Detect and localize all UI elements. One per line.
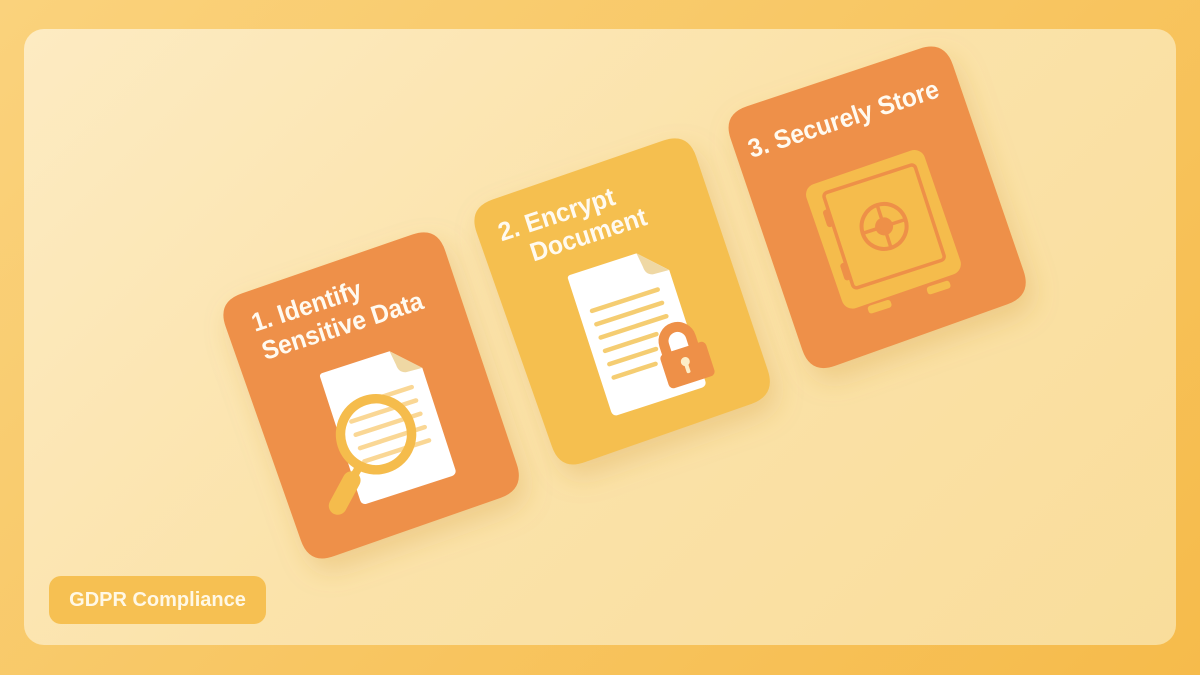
card contents xyxy=(248,257,477,520)
card background xyxy=(474,138,770,464)
safe body xyxy=(803,147,964,312)
icon: document under magnifying glass xyxy=(297,343,457,512)
badge: GDPR Compliance: GDPR Compliance xyxy=(69,589,246,611)
card background xyxy=(223,232,519,558)
panel: step 3 securely store xyxy=(729,47,1026,368)
safe hinges xyxy=(822,209,852,281)
document text lines xyxy=(592,290,679,377)
safe dial xyxy=(856,198,912,255)
card contents xyxy=(494,168,718,433)
icon: safe xyxy=(802,146,968,322)
document sheet xyxy=(319,343,457,505)
heading: 2. Encrypt Document: 2. Encrypt xyxy=(494,181,619,247)
document fold xyxy=(636,245,669,278)
safe feet xyxy=(867,280,951,314)
heading: 2. Encrypt Document xyxy=(494,174,651,275)
document text lines xyxy=(347,387,429,461)
safe door xyxy=(823,164,945,289)
heading: 1. Identify Sensitive Data: 1. Identify xyxy=(248,274,366,338)
card contents xyxy=(744,74,998,334)
panel: step 1 identify sensitive data xyxy=(223,232,519,558)
icon: padlock xyxy=(652,320,716,390)
heading: 1. Identify Sensitive Data xyxy=(248,257,427,366)
heading: 3. Securely Store: 3. Securely Store xyxy=(744,74,943,164)
icon: locked document xyxy=(567,242,718,417)
heading: 1. Identify Sensitive Data: Sensitive Data xyxy=(258,285,427,366)
panel: step 2 encrypt document xyxy=(474,138,770,464)
badge: GDPR Compliance xyxy=(49,576,266,624)
document sheet xyxy=(567,245,707,417)
magnifying glass xyxy=(309,390,427,506)
heading: 2. Encrypt Document: Document xyxy=(526,201,651,267)
document fold xyxy=(390,343,422,376)
card background xyxy=(729,47,1026,368)
